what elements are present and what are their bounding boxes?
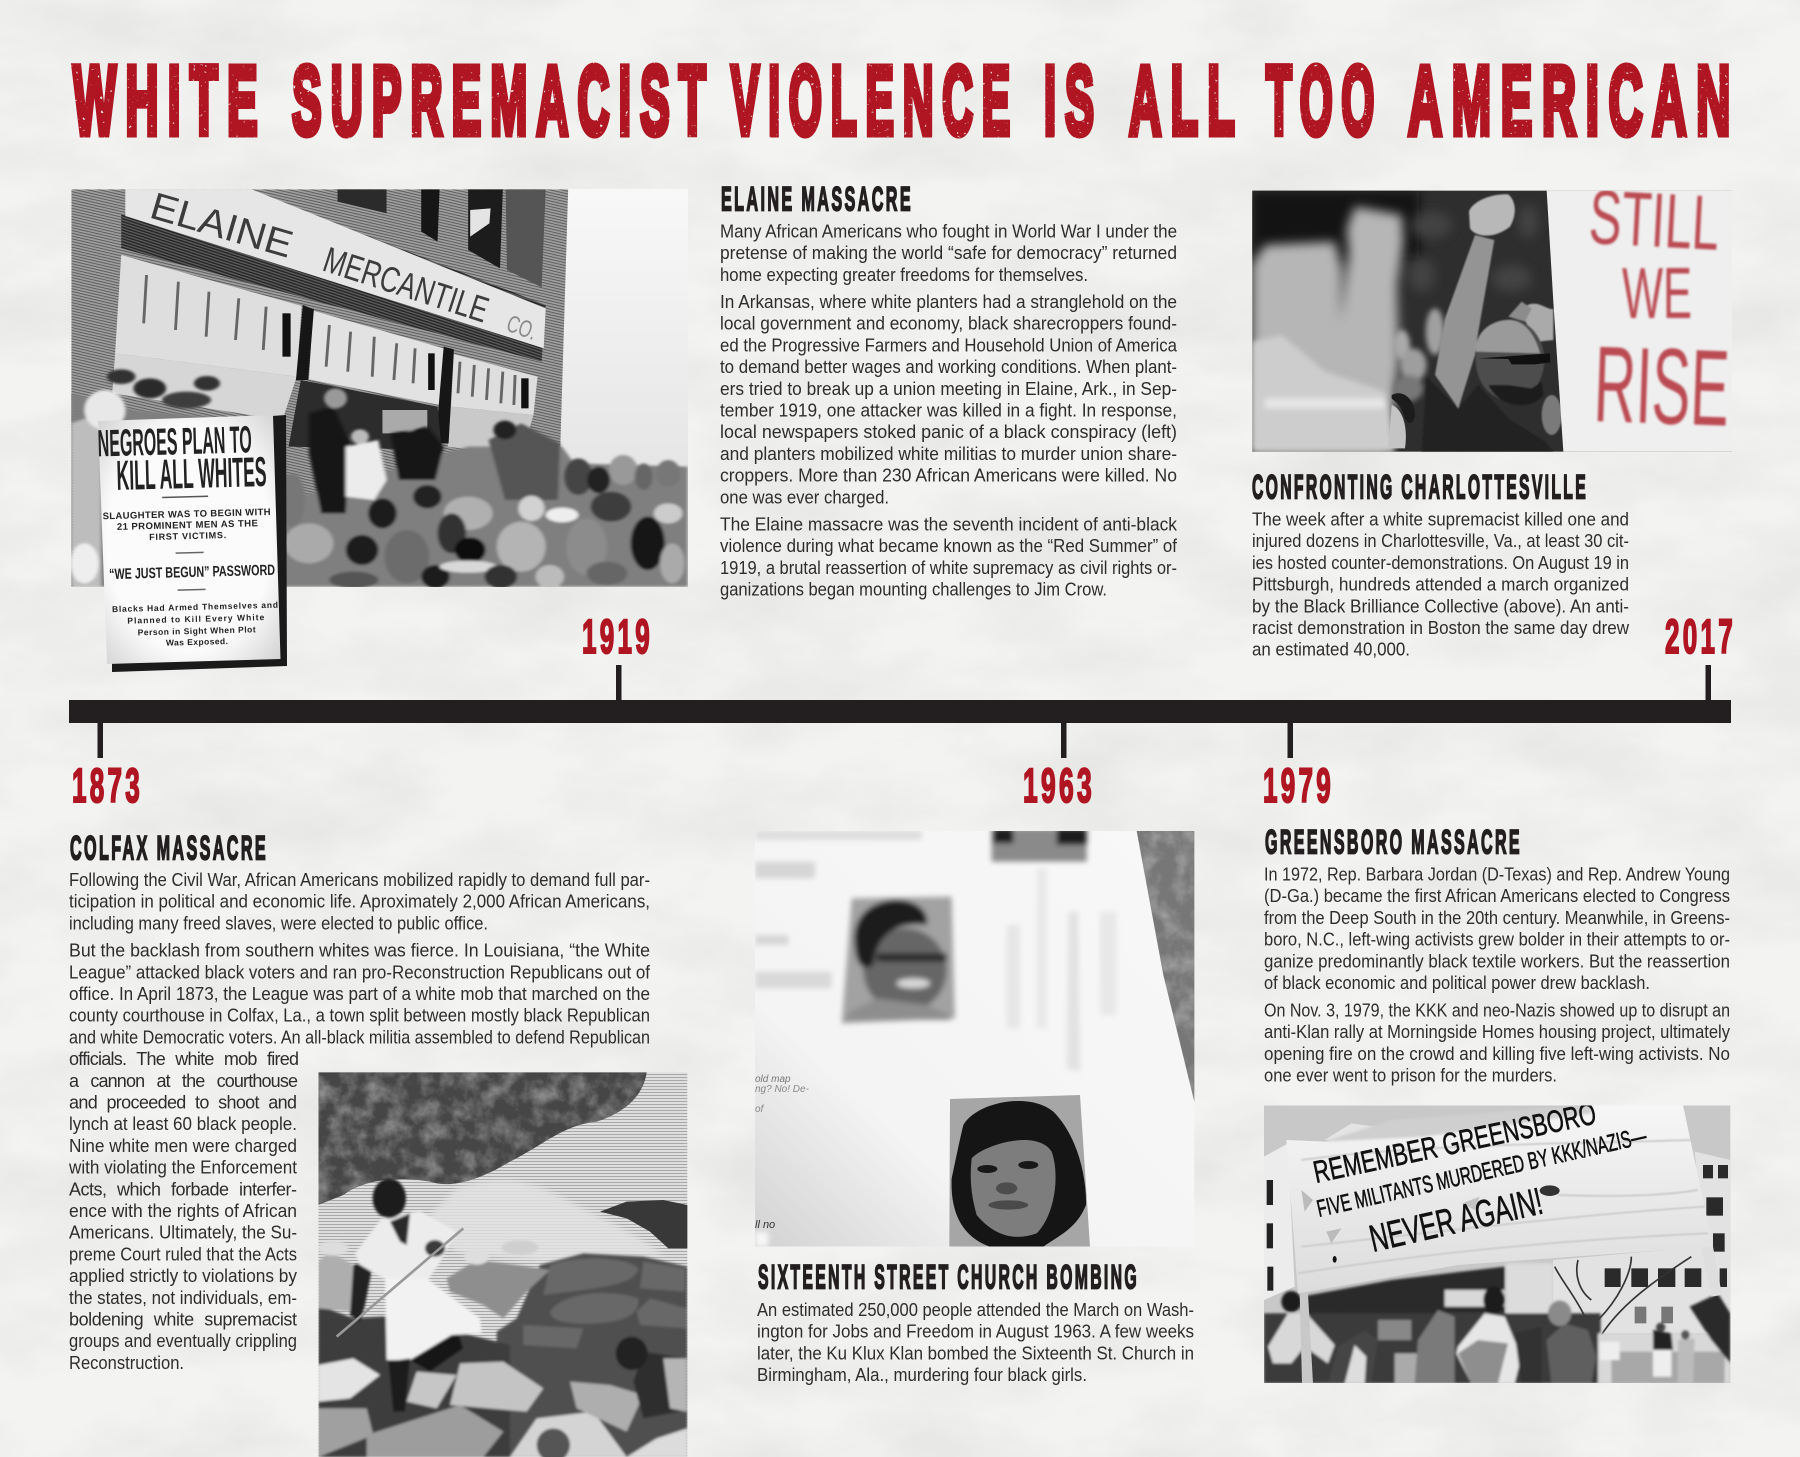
Colfax massacre body text: League” attacked black voters and ran pro-Reconstruction Republicans out of [69, 962, 651, 982]
text: SIXTEENTH STREET CHURCH BOMBING [758, 1258, 1139, 1296]
Colfax massacre body text: the states, not individuals, em- [69, 1288, 297, 1308]
photo: Elaine Mercantile Co. storefront with crowd: MERCANTILE [319, 239, 494, 330]
Colfax massacre body text: But the backlash from southern whites was fierce. In Louisiana, “the White [69, 941, 650, 961]
Confronting Charlottesville body text: racist demonstration in Boston the same day drew [1252, 618, 1630, 638]
Elaine massacre body text: one was ever charged. [720, 487, 889, 507]
Colfax massacre body text: Acts, which forbade interfer- [69, 1179, 297, 1199]
year label 1919: 1919 [582, 611, 653, 664]
Confronting Charlottesville body text: injured dozens in Charlottesville, Va., at least 30 cit- [1252, 531, 1629, 551]
Sixteenth Street Church Bombing body text: An estimated 250,000 people attended the March on Wash- [757, 1300, 1194, 1320]
Elaine massacre body text: local government and economy, black sharecroppers found- [720, 314, 1177, 334]
Greensboro massacre body text [1264, 864, 1730, 1086]
Colfax massacre body text: preme Court ruled that the Acts [69, 1244, 297, 1264]
newspaper clipping: headline: 21 PROMINENT MEN AS THE [117, 518, 258, 533]
Elaine massacre body text: 1919, a brutal reassertion of white supremacy as civil rights or- [720, 558, 1177, 578]
year label 1979: 1979 [1263, 760, 1334, 813]
photo: letter with yearbook portraits of the four girls: old map [755, 1074, 791, 1085]
Sixteenth Street Church Bombing body text: ington for Jobs and Freedom in August 1963. A few weeks [757, 1322, 1194, 1342]
Colfax massacre body text: with violating the Enforcement [68, 1158, 297, 1178]
photo: Elaine Mercantile Co. storefront with crowd: CO. [503, 310, 540, 346]
Colfax massacre body text [68, 870, 651, 1373]
Confronting Charlottesville body text: ies hosted counter-demonstrations. On August 19 in [1252, 553, 1629, 573]
text: COLFAX MASSACRE [70, 830, 268, 868]
Elaine massacre body text: The Elaine massacre was the seventh incident of anti-black [720, 514, 1178, 534]
photo: protester with raised fist and Still We Rise banner: STILL [1587, 174, 1721, 267]
text: GREENSBORO MASSACRE [1265, 824, 1522, 862]
Greensboro massacre body text: ganize predominantly black textile workers. But the reassertion [1264, 951, 1730, 971]
text: KILL ALL WHITES [116, 448, 267, 499]
Colfax massacre body text: lynch at least 60 black people. [69, 1114, 297, 1134]
year label 1963: 1963 [1023, 760, 1095, 813]
Colfax massacre body text: groups and eventually crippling [69, 1331, 297, 1351]
title: IS [1044, 46, 1103, 155]
photo: Remember Greensboro banner march: NEVER AGAIN! [1366, 1181, 1547, 1261]
Confronting Charlottesville body text: Pittsburgh, hundreds attended a march organized [1252, 575, 1629, 595]
timeline bar with tick marks [69, 665, 1731, 758]
photo: Remember Greensboro banner march [1264, 1096, 1730, 1383]
newspaper clipping: headline: Was Exposed. [166, 636, 228, 648]
Elaine massacre body text: tember 1919, one attacker was killed in a fight. In response, [720, 400, 1177, 420]
Confronting Charlottesville body text [1252, 510, 1630, 660]
photo: Elaine Mercantile Co. storefront with crowd [70, 185, 688, 588]
Sixteenth Street Church Bombing body text: Birmingham, Ala., murdering four black girls. [757, 1365, 1087, 1385]
Confronting Charlottesville body text: an estimated 40,000. [1252, 640, 1410, 660]
newspaper clipping: headline: Person in Sight When Plot [138, 624, 256, 637]
title: WHITE [73, 46, 267, 155]
Colfax massacre body text: Following the Civil War, African Americans mobilized rapidly to demand full par- [69, 870, 650, 890]
newspaper clipping: headline: NEGROES PLAN TO [97, 419, 252, 465]
year label 1873: 1873 [72, 760, 143, 813]
Elaine massacre body text: ed the Progressive Farmers and Household Union of America [720, 335, 1178, 355]
photo: Elaine Mercantile Co. storefront with crowd: ELAINE [145, 185, 297, 267]
photo: letter with yearbook portraits of the four girls: of [755, 1104, 765, 1115]
photo: letter with yearbook portraits of the four girls: ng? No! De- [755, 1084, 810, 1095]
engraving: Colfax defender with rifle, smoke and fallen men [318, 1072, 687, 1457]
newspaper clipping: headline: Planned to Kill Every White [127, 612, 265, 626]
Confronting Charlottesville body text: The week after a white supremacist killed one and [1252, 510, 1629, 530]
Confronting Charlottesville body text: by the Black Brilliance Collective (above). An anti- [1252, 596, 1629, 616]
Elaine massacre body text: and planters mobilized white militias to murder union share- [720, 444, 1177, 464]
Sixteenth Street Church Bombing body text [757, 1300, 1194, 1385]
Elaine massacre body text: violence during what became known as the “Red Summer” of [720, 536, 1178, 556]
title: SUPREMACIST [292, 46, 715, 155]
Greensboro massacre body text: On Nov. 3, 1979, the KKK and neo-Nazis showed up to disrupt an [1264, 1000, 1730, 1020]
Greensboro massacre body text: opening fire on the crowd and killing five left-wing activists. No [1264, 1044, 1730, 1064]
newspaper clipping: headline: “WE JUST BEGUN” PASSWORD [109, 562, 275, 583]
Elaine massacre body text: ganizations began mounting challenges to Jim Crow. [720, 580, 1107, 600]
Colfax massacre body text: Americans. Ultimately, the Su- [69, 1223, 297, 1243]
text: ELAINE MASSACRE [721, 180, 913, 218]
Greensboro massacre body text: of black economic and political power drew backlash. [1264, 973, 1650, 993]
Greensboro massacre body text: from the Deep South in the 20th century. Meanwhile, in Greens- [1264, 908, 1730, 928]
Colfax massacre body text: ence with the rights of African [69, 1201, 297, 1221]
Colfax massacre body text: county courthouse in Colfax, La., a town split between mostly black Republican [69, 1006, 650, 1026]
Elaine massacre body text [720, 222, 1178, 600]
photo: letter with yearbook portraits of the four girls [755, 828, 1194, 1247]
Elaine massacre body text: croppers. More than 230 African Americans were killed. No [720, 466, 1177, 486]
title: VIOLENCE [731, 46, 1019, 155]
Colfax massacre body text: officials. The white mob fired [69, 1049, 299, 1069]
newspaper clipping: headline: SLAUGHTER WAS TO BEGIN WITH [102, 507, 271, 522]
photo: letter with yearbook portraits of the four girls: ll no [755, 1219, 775, 1231]
newspaper clipping: headline: FIRST VICTIMS. [149, 530, 226, 542]
Greensboro massacre body text: anti-Klan rally at Morningside Homes housing project, ultimately [1264, 1022, 1730, 1042]
Elaine massacre body text: home expecting greater freedoms for themselves. [720, 265, 1088, 285]
Colfax massacre body text: boldening white supremacist [69, 1310, 297, 1330]
year label 2017: 2017 [1665, 611, 1736, 664]
Greensboro massacre body text: In 1972, Rep. Barbara Jordan (D-Texas) and Rep. Andrew Young [1264, 864, 1730, 884]
title: ALL [1129, 46, 1244, 155]
title [73, 46, 1740, 155]
Colfax massacre body text: including many freed slaves, were elected to public office. [69, 913, 488, 933]
Colfax massacre body text: office. In April 1873, the League was part of a white mob that marched on the [69, 984, 650, 1004]
photo: Remember Greensboro banner march: REMEMBER GREENSBORO [1310, 1096, 1599, 1190]
title: TOO [1266, 46, 1383, 155]
newspaper clipping: headline: Blacks Had Armed Themselves and [112, 600, 278, 614]
Colfax massacre body text: and proceeded to shoot and [69, 1092, 297, 1112]
photo: protester with raised fist and Still We Rise banner [1252, 174, 1732, 452]
Greensboro massacre body text: (D-Ga.) became the first African Americans elected to Congress [1264, 886, 1730, 906]
Colfax massacre body text: and white Democratic voters. An all-black militia assembled to defend Republican [69, 1027, 650, 1047]
photo: protester with raised fist and Still We Rise banner: WE [1622, 254, 1692, 334]
Greensboro massacre body text: one ever went to prison for the murders. [1264, 1066, 1557, 1086]
Sixteenth Street Church Bombing body text: later, the Ku Klux Klan bombed the Sixteenth St. Church in [757, 1343, 1194, 1363]
newspaper clipping: headline [97, 415, 287, 672]
Elaine massacre body text: local newspapers stoked panic of a black conspiracy (left) [720, 422, 1177, 442]
Greensboro massacre body text: boro, N.C., left-wing activists grew bolder in their attempts to or- [1264, 930, 1730, 950]
Elaine massacre body text: ers tried to break up a union meeting in Elaine, Ark., in Sep- [720, 379, 1177, 399]
Colfax massacre body text: applied strictly to violations by [69, 1266, 297, 1286]
Colfax massacre body text: Nine white men were charged [69, 1136, 297, 1156]
Colfax massacre body text: a cannon at the courthouse [69, 1071, 298, 1091]
Elaine massacre body text: to demand better wages and working conditions. When plant- [720, 357, 1177, 377]
Colfax massacre body text: ticipation in political and economic life. Aproximately 2,000 African Americans, [69, 892, 650, 912]
Elaine massacre body text: Many African Americans who fought in World War I under the [720, 222, 1177, 242]
Colfax massacre body text: Reconstruction. [69, 1353, 184, 1373]
Elaine massacre body text: In Arkansas, where white planters had a stranglehold on the [720, 292, 1177, 312]
Elaine massacre body text: pretense of making the world “safe for democracy” returned [720, 243, 1177, 263]
